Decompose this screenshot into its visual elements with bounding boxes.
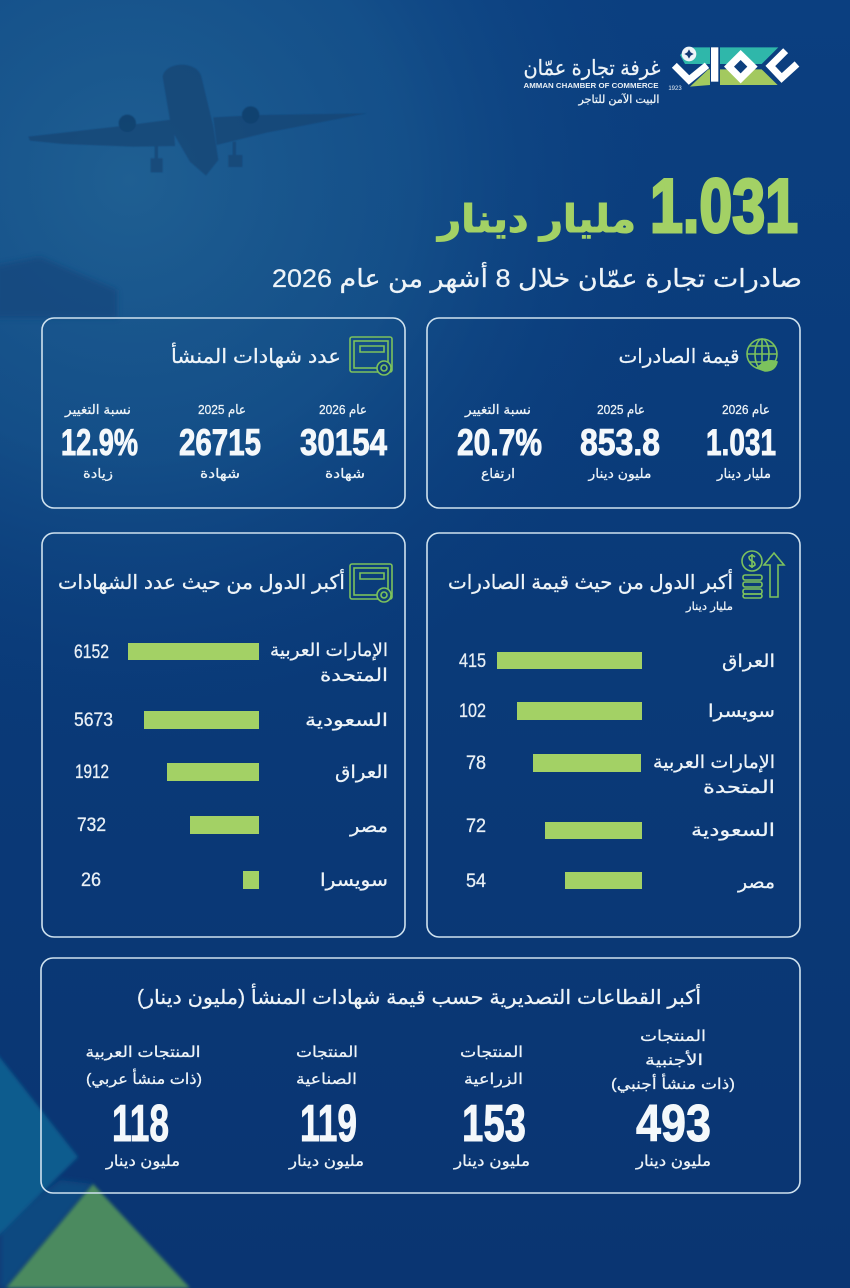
row: Iraq xyxy=(75,762,388,783)
heading: أكبر القطاعات التصديرية حسب قيمة شهادات المنشأ (مليون دينار) xyxy=(137,983,701,1009)
row: Switzerland: سويسرا xyxy=(320,870,388,891)
sector: foreign products: مليون دينار xyxy=(635,1153,711,1170)
column: 2026: عام 2026 xyxy=(319,402,367,417)
logo Arabic name: غرفة تجارة عمّان xyxy=(524,57,661,80)
sector: agricultural products xyxy=(453,1044,530,1170)
sector: agricultural products: الزراعية xyxy=(464,1071,523,1088)
column: change rate: نسبة التغيير xyxy=(464,402,531,418)
row: UAE: 6152 xyxy=(74,642,109,663)
panel: export value xyxy=(427,318,800,508)
sector: industrial products: 119 xyxy=(300,1095,357,1153)
heading: قيمة الصادرات xyxy=(618,346,740,368)
sector: foreign products: المنتجات xyxy=(640,1028,706,1045)
column: change rate: 12.9% xyxy=(61,422,138,463)
row: UAE xyxy=(466,752,775,797)
row: Egypt: 54 xyxy=(466,871,486,892)
column: change rate: ارتفاع xyxy=(481,466,515,482)
column: 2026: شهادة xyxy=(325,466,365,482)
row: Iraq: 1912 xyxy=(75,762,109,783)
row: Egypt xyxy=(466,871,775,893)
row: Iraq xyxy=(459,651,775,672)
column: 2026: 30154 xyxy=(300,422,387,463)
row: UAE: المتحدة xyxy=(320,665,388,685)
headline number: 1.031 xyxy=(650,164,798,249)
row: Saudi Arabia: 72 xyxy=(466,816,486,837)
column: 2025 xyxy=(179,402,261,482)
row: Iraq: العراق xyxy=(335,762,388,783)
column: 2025: 26715 xyxy=(179,422,261,463)
sector: Arab products: المنتجات العربية xyxy=(86,1044,200,1061)
row: Switzerland xyxy=(81,870,388,891)
sector: industrial products: الصناعية xyxy=(296,1071,357,1088)
sector: Arab products: مليون دينار xyxy=(105,1153,180,1170)
subtitle: صادرات تجارة عمّان خلال 8 أشهر من عام 2026 xyxy=(272,261,802,294)
row: UAE: الإمارات العربية xyxy=(270,640,388,661)
column: change rate xyxy=(61,402,138,482)
row: Iraq: 415 xyxy=(459,651,486,672)
headline figure xyxy=(436,164,798,249)
icon: globe xyxy=(747,339,777,371)
column: change rate: زيادة xyxy=(83,466,113,482)
row: Switzerland xyxy=(459,701,775,722)
column: change rate xyxy=(457,402,542,482)
row: Saudi Arabia: 5673 xyxy=(74,710,113,731)
row: Switzerland: 102 xyxy=(459,701,486,722)
row: Saudi Arabia xyxy=(466,816,775,841)
icon: certificate xyxy=(350,337,392,375)
logo: Amman Chamber of Commerce xyxy=(524,47,797,106)
bar chart: export value rows xyxy=(459,651,775,893)
panel: top countries by export value xyxy=(427,533,800,937)
bar chart: certificate rows xyxy=(74,640,388,891)
sector: industrial products: المنتجات xyxy=(296,1044,358,1061)
row: Saudi Arabia: السعودية xyxy=(305,710,388,731)
row: Saudi Arabia xyxy=(74,710,388,731)
column: 2026 xyxy=(706,402,776,482)
row: Iraq: العراق xyxy=(722,651,775,672)
panel: certificates of origin count xyxy=(42,318,405,508)
column: 2026: مليار دينار xyxy=(716,466,771,482)
column: 2025: مليون دينار xyxy=(587,466,652,482)
column: 2026 xyxy=(300,402,387,482)
logo year: 1923 xyxy=(668,86,682,92)
sector: agricultural products: المنتجات xyxy=(460,1044,523,1061)
row: UAE: الإمارات العربية xyxy=(653,752,775,773)
sector: Arab products: (ذات منشأ عربي) xyxy=(86,1068,202,1089)
row: Egypt: مصر xyxy=(737,872,775,893)
row: Switzerland: 26 xyxy=(81,870,101,891)
unit note: مليار دينار xyxy=(685,601,733,613)
column: change rate: نسبة التغيير xyxy=(64,402,131,418)
sector: Arab products xyxy=(86,1044,202,1170)
column: 2026: عام 2026 xyxy=(722,402,770,417)
icon: certificate xyxy=(350,564,392,602)
row: Egypt: مصر xyxy=(349,816,388,837)
sector: Arab products: 118 xyxy=(112,1095,169,1153)
logo mark xyxy=(674,47,797,87)
sector: industrial products: مليون دينار xyxy=(288,1153,364,1170)
column: 2025: شهادة xyxy=(200,466,240,482)
heading: عدد شهادات المنشأ xyxy=(171,342,341,368)
column: 2025 xyxy=(580,402,660,482)
column: 2026: 1.031 xyxy=(706,422,776,463)
sector: agricultural products: مليون دينار xyxy=(453,1153,530,1170)
heading: أكبر الدول من حيث عدد الشهادات xyxy=(58,569,345,594)
row: UAE xyxy=(74,640,388,685)
column: 2025: عام 2025 xyxy=(198,402,246,417)
panel: top export sectors xyxy=(41,958,800,1193)
row: UAE: 78 xyxy=(466,753,486,774)
logo English name: AMMAN CHAMBER OF COMMERCE xyxy=(524,81,658,90)
column: 2025: عام 2025 xyxy=(597,402,645,417)
row: Egypt xyxy=(77,815,388,837)
panel: top countries by certificates xyxy=(42,533,405,937)
row: Switzerland: سويسرا xyxy=(708,701,775,722)
sector: foreign products: الأجنبية xyxy=(645,1050,703,1069)
column: 2025: 853.8 xyxy=(580,422,660,463)
row: Egypt: 732 xyxy=(77,815,106,836)
warehouse silhouette xyxy=(0,257,117,318)
row: UAE: المتحدة xyxy=(703,777,775,797)
sector: industrial products xyxy=(288,1044,364,1170)
icon: coins and arrow xyxy=(742,551,784,598)
sector: foreign products: 493 xyxy=(636,1095,711,1153)
sector: foreign products: (ذات منشأ أجنبي) xyxy=(611,1073,735,1094)
headline unit: مليار دينار xyxy=(436,199,636,241)
sector: foreign products xyxy=(611,1028,735,1170)
sector: agricultural products: 153 xyxy=(462,1095,526,1153)
logo tagline: البيت الآمن للتاجر xyxy=(577,93,660,106)
heading: أكبر الدول من حيث قيمة الصادرات xyxy=(448,569,733,594)
row: Saudi Arabia: السعودية xyxy=(691,820,775,841)
airplane silhouette xyxy=(28,65,367,176)
column: change rate: 20.7% xyxy=(457,422,542,463)
